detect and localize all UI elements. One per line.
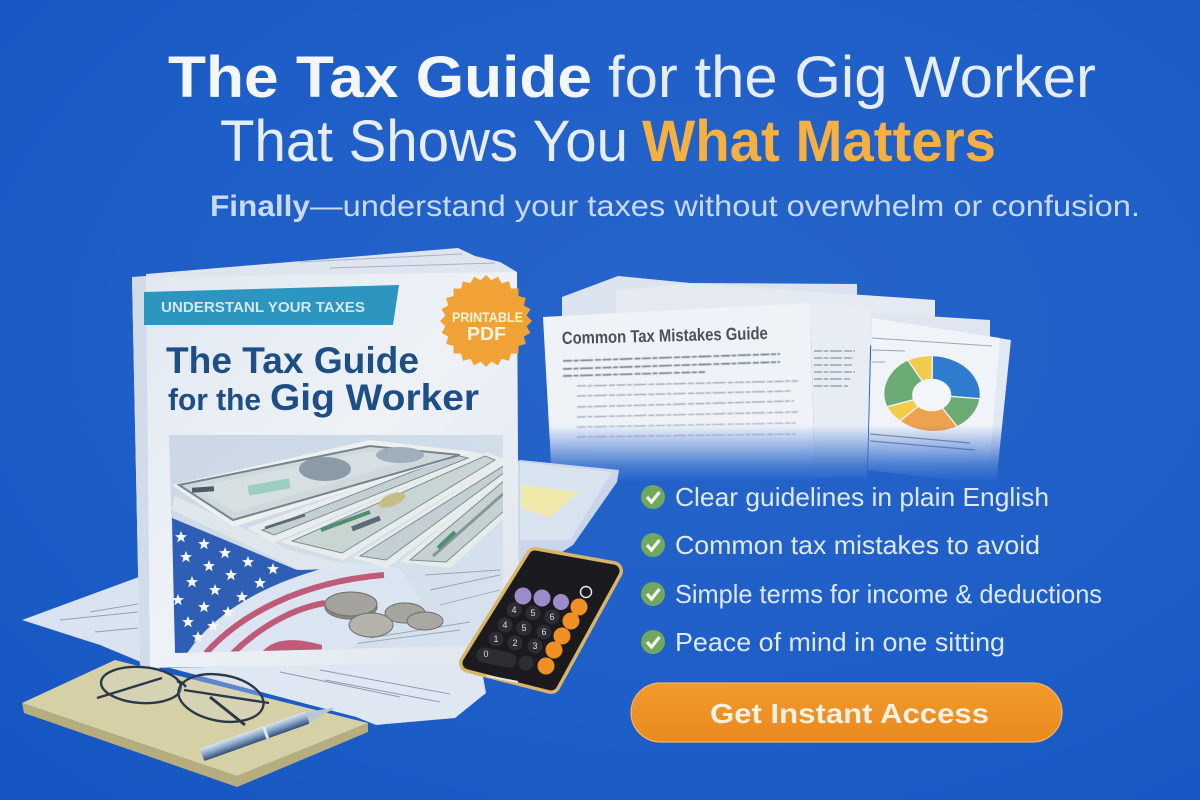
bill 5 (400, 480, 503, 568)
dollar bills (172, 440, 507, 570)
left paper (22, 577, 160, 670)
key digits: 4 (511, 605, 517, 615)
subtitle: —understand your taxes without overwhelm or confusion. (310, 190, 1140, 223)
call to action button: Get Instant Access (710, 698, 989, 729)
book title: The Tax Guide (166, 340, 419, 381)
printable pdf badge: PRINTABLE (452, 309, 523, 325)
home bar (487, 676, 518, 682)
flag stars (172, 531, 279, 642)
key digits: 5 (521, 623, 527, 633)
book (132, 248, 532, 668)
key digits (483, 605, 555, 659)
back pages (562, 276, 990, 350)
item 3: Simple terms for income & deductions (675, 579, 1102, 609)
right page with donut chart (868, 318, 1011, 485)
pen (200, 702, 336, 761)
ring key (580, 586, 592, 598)
middle page (810, 303, 871, 478)
bill 3 (280, 452, 505, 560)
coins (325, 592, 443, 637)
body text lines (563, 354, 798, 437)
key digits: 4 (502, 620, 508, 630)
bill 2 (247, 450, 483, 543)
heading: common tax mistakes guide: Common Tax Mistakes Guide (562, 323, 768, 348)
book title: for the (168, 382, 261, 417)
key digits: 5 (530, 608, 536, 618)
key digits: 6 (549, 612, 555, 622)
key digits: 3 (532, 641, 538, 651)
cover (132, 272, 519, 668)
banner: UNDERSTANL YOUR TAXES (161, 299, 365, 316)
key digits: 1 (493, 634, 499, 644)
item 2: Common tax mistakes to avoid (675, 530, 1040, 560)
document stack: common tax mistakes guide (543, 276, 1011, 485)
sticky note (521, 485, 579, 517)
spine (132, 276, 150, 668)
call to action button (631, 683, 1062, 742)
printable pdf badge: PDF (467, 324, 506, 344)
dark keys (475, 602, 560, 670)
checklist (641, 482, 1102, 657)
book title (166, 340, 479, 418)
bill stack under the fan (172, 496, 360, 570)
title: What Matters (642, 109, 996, 174)
cover photo (165, 433, 507, 658)
book title: Gig Worker (270, 377, 479, 418)
key digits: 0 (483, 649, 489, 659)
notebook (22, 660, 368, 787)
key digits: 6 (541, 627, 547, 637)
back right paper (470, 460, 619, 610)
title: That Shows You (220, 109, 628, 174)
donut chart (884, 356, 980, 432)
papers under the book (22, 460, 619, 725)
main page (543, 303, 815, 482)
banner (144, 285, 399, 325)
title: The Tax Guide (168, 45, 592, 110)
tax form in photo (345, 570, 500, 645)
purple keys (514, 588, 569, 610)
bill 4 (352, 458, 507, 568)
bill 1 (172, 440, 473, 527)
item 4: Peace of mind in one sitting (675, 627, 1005, 657)
page edges (146, 248, 517, 290)
flag (172, 518, 384, 653)
title (168, 45, 1096, 174)
bottom paper (170, 660, 486, 725)
key digits: 2 (512, 638, 518, 648)
orange keys (538, 598, 588, 674)
printable pdf badge (440, 275, 532, 367)
item 1: Clear guidelines in plain English (675, 482, 1049, 512)
calculator phone (469, 557, 613, 684)
glasses (97, 664, 269, 728)
title: for the Gig Worker (608, 45, 1096, 110)
subtitle: Finally (210, 190, 310, 223)
